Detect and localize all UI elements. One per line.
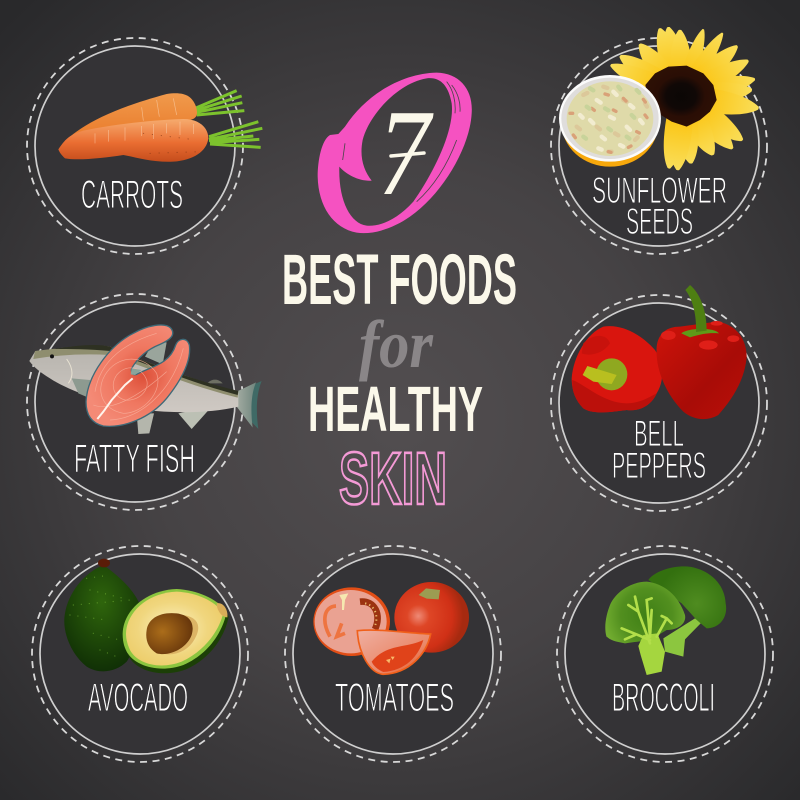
ring: carrots	[27, 38, 243, 254]
label: bell: BELL	[634, 413, 684, 454]
ring: avocado	[32, 546, 248, 762]
panel: tomatoes	[285, 546, 501, 762]
icon: broccoli	[605, 566, 726, 675]
panel: sunflower seeds	[551, 25, 767, 254]
icon: sunflower and bowl of seeds	[559, 25, 761, 171]
panel: fatty fish	[27, 294, 262, 510]
label: carrots: CARROTS	[81, 173, 183, 217]
label: avocado: AVOCADO	[88, 676, 188, 720]
panel: avocado	[32, 546, 248, 762]
icon: carrots	[58, 91, 262, 162]
icon: bell peppers	[572, 285, 747, 419]
label: seeds: SEEDS	[626, 201, 693, 242]
panel: bell peppers	[551, 285, 767, 511]
label: tomatoes: TOMATOES	[335, 676, 454, 720]
ring: fatty fish	[27, 294, 243, 510]
ring: tomatoes	[285, 546, 501, 762]
label: fatty fish: FATTY FISH	[74, 437, 195, 481]
heading: best foods: BEST FOODS	[282, 241, 517, 320]
icon: tomatoes	[313, 582, 469, 674]
brush circle	[318, 73, 472, 233]
ring: sunflower seeds	[551, 38, 767, 254]
title block	[282, 73, 517, 520]
ring: broccoli	[557, 546, 773, 762]
icon: avocado	[64, 559, 229, 673]
icon: fish and salmon steak	[29, 325, 262, 434]
script word: for: for	[359, 306, 433, 382]
ring: bell peppers	[551, 295, 767, 511]
panel: broccoli	[557, 546, 773, 762]
label: peppers: PEPPERS	[612, 445, 706, 486]
heading: healthy: HEALTHY	[308, 373, 483, 445]
heading: skin: SKIN	[339, 437, 447, 520]
panel: carrots	[27, 38, 262, 254]
number 7: 7	[378, 84, 434, 221]
